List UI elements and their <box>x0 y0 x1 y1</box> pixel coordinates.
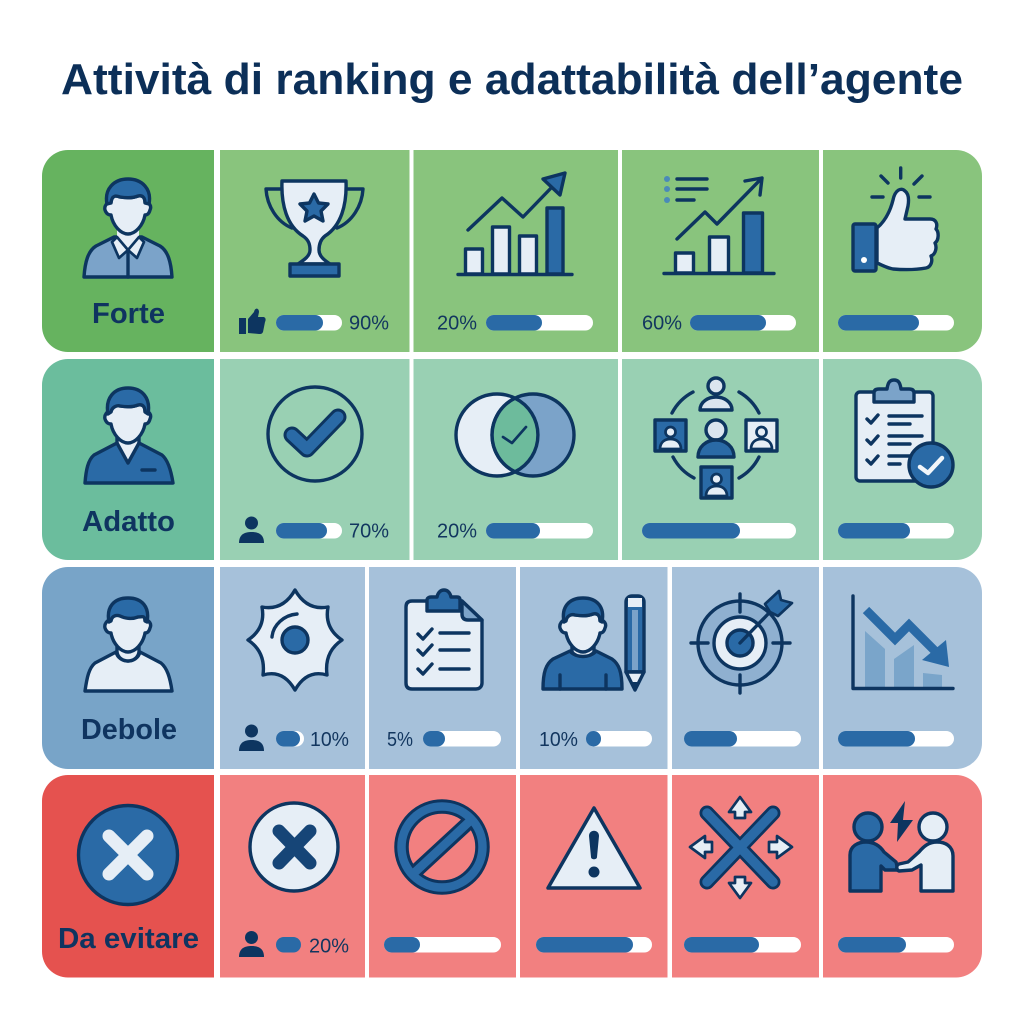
icon: person with V-neck <box>85 388 173 483</box>
icon: X with four arrows <box>690 797 792 898</box>
icon: declining chart with arrow <box>853 596 953 688</box>
cell: warning <box>520 775 668 978</box>
icon: team network <box>655 378 777 498</box>
icon: person with shirt and collar <box>84 179 172 277</box>
metric: bar <box>838 937 954 952</box>
metric: person 10% <box>239 724 349 751</box>
metric: thumb 90%: 90% <box>349 312 389 334</box>
metric: thumb 90% <box>239 309 389 334</box>
cell: declining chart <box>823 567 982 769</box>
cell: bar chart with arrow <box>414 150 618 352</box>
cell: burst <box>220 567 365 769</box>
cell: trophy <box>220 150 410 352</box>
label cell: Forte <box>42 150 214 352</box>
metric: bar <box>838 523 954 538</box>
cell: person with pencil <box>520 567 668 769</box>
cell: target <box>672 567 819 769</box>
icon: target with arrow <box>691 591 792 693</box>
label: Da evitare: Da evitare <box>58 923 199 955</box>
icon: warning triangle <box>548 808 640 888</box>
cell: prohibited <box>369 775 516 978</box>
label: Forte: Forte <box>92 298 165 330</box>
cell: thumbs up <box>823 150 982 352</box>
label: Debole: Debole <box>81 714 177 746</box>
icon: two people in conflict <box>850 801 953 891</box>
icon: Venn diagram with check <box>456 394 574 476</box>
icon: spiky burst <box>248 590 342 690</box>
metric: 10% <box>539 729 652 751</box>
panel: row Da evitare <box>42 775 982 978</box>
panel: row Adatto <box>42 359 982 560</box>
icon: X in blue circle <box>78 806 178 904</box>
metric: 5%: 5% <box>387 729 413 751</box>
cell: list chart <box>622 150 819 352</box>
metric: 5% <box>387 729 501 751</box>
metric: bar <box>642 523 796 538</box>
icon: trophy with star <box>266 181 363 276</box>
metric: person 20%: 20% <box>309 936 349 958</box>
metric: 60% <box>642 312 796 334</box>
cell: crossed arrows <box>672 775 819 978</box>
icon: thumbs up with rays <box>853 168 938 271</box>
metric: 20%: 20% <box>437 312 477 334</box>
cell: X circle <box>220 775 365 978</box>
icon: growth chart <box>458 173 572 274</box>
metric: bar <box>536 937 652 952</box>
cell: venn <box>414 359 618 560</box>
panel: row Debole <box>42 567 982 769</box>
icon: list and growth chart <box>664 176 774 274</box>
metric: bar <box>384 937 501 952</box>
icon: person and pencil <box>543 596 644 690</box>
metric: bar <box>838 315 954 330</box>
label: Adatto: Adatto <box>82 506 175 538</box>
metric: 20%: 20% <box>437 520 477 542</box>
icon: person with round neck <box>85 598 172 691</box>
metric: person 70% <box>239 516 389 543</box>
icon: clipboard with folded corner <box>406 590 482 689</box>
metric: 10%: 10% <box>539 729 578 751</box>
metric: 20% <box>437 520 593 542</box>
cell: conflict handshake <box>823 775 982 978</box>
metric: bar <box>838 731 954 746</box>
cell: checklist with badge <box>823 359 982 560</box>
metric: bar <box>684 937 801 952</box>
cell: network of people <box>622 359 819 560</box>
label cell: Da evitare <box>42 775 214 978</box>
metric: 60%: 60% <box>642 312 682 334</box>
panel: row Forte <box>42 150 982 352</box>
metric: person 10%: 10% <box>310 729 349 751</box>
label cell: Debole <box>42 567 214 769</box>
metric: bar <box>684 731 801 746</box>
metric: person 20% <box>239 931 349 958</box>
icon: check in circle <box>268 387 362 481</box>
metric: 20% <box>437 312 593 334</box>
cell: check circle <box>220 359 410 560</box>
icon: clipboard with check badge <box>856 380 953 487</box>
icon: dark X in light circle <box>250 803 338 891</box>
cell: checklist <box>369 567 516 769</box>
metric: person 70%: 70% <box>349 520 389 542</box>
title: Attività di ranking e adattabilità dell’agente <box>61 56 963 104</box>
icon: no sign <box>402 806 482 888</box>
label cell: Adatto <box>42 359 214 560</box>
